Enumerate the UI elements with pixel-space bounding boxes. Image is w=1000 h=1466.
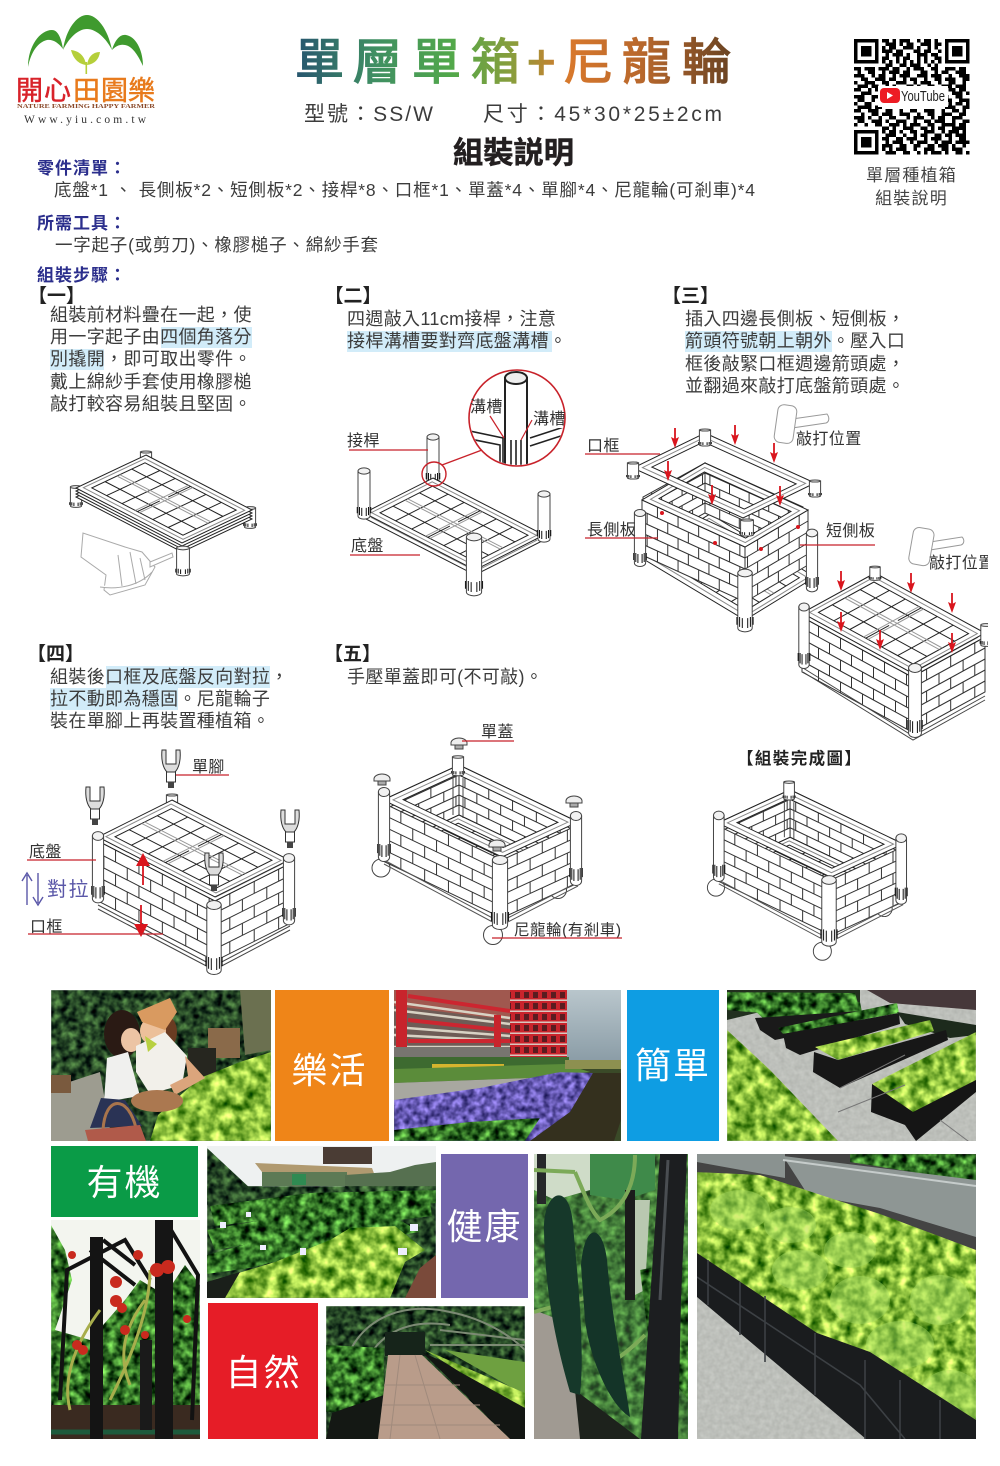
label: caster leg xyxy=(176,758,229,776)
step 5 text: 【五】 xyxy=(324,643,381,665)
top rim frame xyxy=(627,429,821,536)
step 1 text: 組裝前材料疊在一起，使 xyxy=(50,305,252,325)
label: nylon caster with brake: 尼龍輪(有剎車) xyxy=(514,921,621,939)
step 3 text: 箭頭符號朝上朝外。壓入口 xyxy=(685,331,905,351)
photo: building with flower garden xyxy=(394,990,621,1141)
icon: hammer xyxy=(908,527,964,567)
label: connector rod xyxy=(347,432,428,450)
label: connector rod: 接桿 xyxy=(347,432,380,450)
title: 單層單箱+尼龍輪 xyxy=(295,36,731,90)
photo: lettuce in black planters xyxy=(697,1154,976,1439)
step 1 text: 敲打較容易組裝且堅固。 xyxy=(50,394,252,414)
panel: healthy: 健康 xyxy=(446,1206,523,1247)
step 1 text: 用一字起子由四個角落分 xyxy=(50,327,252,347)
step 3 text: 插入四邊長側板、短側板， xyxy=(685,309,905,329)
detail zoom circle: grooves xyxy=(465,370,570,470)
photo: rooftop planters on black stands xyxy=(727,990,976,1141)
label: pull apart xyxy=(22,873,90,905)
step 3 text: 框後敲緊口框週邊箭頭處， xyxy=(685,354,905,374)
tools xyxy=(37,214,378,255)
icon: sprout xyxy=(71,50,100,74)
parts list: 底盤*1 、 長側板*2、短側板*2、接桿*8、口框*1、單蓋*4、單腳*4、尼龍輪(可剎車)*4 xyxy=(54,180,755,200)
panel: LOHAS xyxy=(275,990,389,1141)
red arrows xyxy=(837,571,956,653)
step 3 text: 並翻過來敲打底盤箭頭處。 xyxy=(685,376,905,396)
logo english tagline: NATURE FARMING HAPPY FARMER xyxy=(17,103,155,110)
QR code xyxy=(851,36,972,157)
subtitle: 組裝説明 xyxy=(453,137,574,170)
label: short side panel: 短側板 xyxy=(826,522,875,540)
label: short side panel xyxy=(800,522,875,545)
step 2 text: 四週敲入11cm接桿，注意 xyxy=(347,309,556,329)
photo: rooftop vegetable garden xyxy=(207,1146,436,1298)
model and size: 尺寸：45*30*25±2cm xyxy=(483,103,722,126)
label: cap xyxy=(462,723,514,741)
step 5 text: 手壓單蓋即可(不可敲)。 xyxy=(347,667,543,687)
model and size: 型號：SS/W xyxy=(304,103,433,126)
label: pull apart: 對拉 xyxy=(47,878,90,901)
step 3 text xyxy=(662,285,905,396)
step 1 text: 別撬開，即可取出零件。 xyxy=(50,349,252,369)
QR caption: 組裝說明 xyxy=(875,189,948,208)
step 1 text xyxy=(28,285,252,414)
QR caption xyxy=(866,166,957,208)
panel: organic: 有機 xyxy=(86,1162,163,1203)
model and size xyxy=(304,103,722,126)
logo xyxy=(16,15,155,126)
panel: healthy xyxy=(441,1154,528,1298)
step 3 text: 【三】 xyxy=(662,285,719,307)
step 4 text: 拉不動即為穩固。尼龍輪子 xyxy=(50,689,270,709)
photo: cucumbers on black post xyxy=(534,1154,688,1439)
QR caption: 單層種植箱 xyxy=(866,166,957,185)
small detail circle xyxy=(422,462,446,486)
step 3 illustration: turned-over box xyxy=(798,527,995,740)
icon: hammer xyxy=(773,404,829,444)
parts list xyxy=(37,159,755,200)
steps heading: 組裝步驟： xyxy=(37,265,127,285)
red arrows xyxy=(660,425,800,551)
finished heading: 【組裝完成圖】 xyxy=(737,748,862,768)
label: caster leg: 單腳 xyxy=(192,758,225,776)
logo name: 開心田園樂 xyxy=(16,76,155,106)
logo url: Www.yiu.com.tw xyxy=(24,114,147,126)
panel: natural: 自然 xyxy=(225,1352,302,1393)
label: rim frame: 口框 xyxy=(30,918,63,936)
step 5 illustration: box with caps and casters xyxy=(372,723,622,944)
label: long side panel: 長側板 xyxy=(587,521,636,539)
red pull arrows xyxy=(134,853,150,937)
photo: mother and daughter gardening xyxy=(51,990,271,1141)
step 3 illustration: assembling side panels and frame xyxy=(585,404,875,632)
step 1 text: 戴上綿紗手套使用橡膠槌 xyxy=(50,372,252,392)
label: base tray xyxy=(27,843,96,861)
icon: green hills xyxy=(28,15,143,67)
label: base tray xyxy=(350,537,420,555)
label: rim frame: 口框 xyxy=(587,437,620,455)
icon: YouTube: YouTube xyxy=(901,88,945,105)
panel: simple xyxy=(627,990,719,1141)
step 4 text: 裝在單腳上再裝置種植箱。 xyxy=(50,711,270,731)
panel: organic xyxy=(51,1146,198,1217)
photo: garden path under arch xyxy=(326,1306,525,1439)
step 4 text: 【四】 xyxy=(27,643,84,665)
label: base tray: 底盤 xyxy=(351,537,384,555)
label: cap: 單蓋 xyxy=(481,723,514,741)
step 4 text xyxy=(27,643,289,731)
panel: natural xyxy=(208,1303,318,1439)
tools: 一字起子(或剪刀)、橡膠槌子、綿紗手套 xyxy=(55,235,378,255)
icon: gloved hand with screwdriver xyxy=(81,533,173,595)
label: base tray: 底盤 xyxy=(29,843,62,861)
detail zoom circle: grooves: 溝槽 xyxy=(533,410,566,428)
photo: tomatoes on black frame xyxy=(51,1220,200,1439)
step 4 text: 組裝後口框及底盤反向對拉， xyxy=(50,667,289,687)
label: strike position: 敲打位置 xyxy=(796,430,862,448)
label: rim frame xyxy=(28,918,163,936)
detail zoom circle: grooves: 溝槽 xyxy=(470,398,503,416)
step 2 illustration: tray with posts xyxy=(347,370,570,596)
step 4 illustration: pull-test box with caster legs xyxy=(22,750,299,975)
step 5 text xyxy=(324,643,543,687)
parts list: 零件清單： xyxy=(37,159,127,178)
step 2 text: 接桿溝槽要對齊底盤溝槽。 xyxy=(347,331,567,351)
label: rim frame xyxy=(585,437,660,455)
step 1 text: 【一】 xyxy=(28,285,85,307)
step 2 text: 【二】 xyxy=(324,285,382,307)
label: long side panel xyxy=(585,521,658,539)
tools: 所需工具： xyxy=(37,214,127,233)
label: strike position: 敲打位置 xyxy=(929,554,995,572)
finished box illustration xyxy=(707,781,907,960)
step 2 text xyxy=(324,285,567,352)
panel: LOHAS: 樂活 xyxy=(291,1050,368,1091)
panel: simple: 簡單 xyxy=(635,1045,711,1086)
step 1 illustration: base tray pry-open xyxy=(70,451,256,595)
